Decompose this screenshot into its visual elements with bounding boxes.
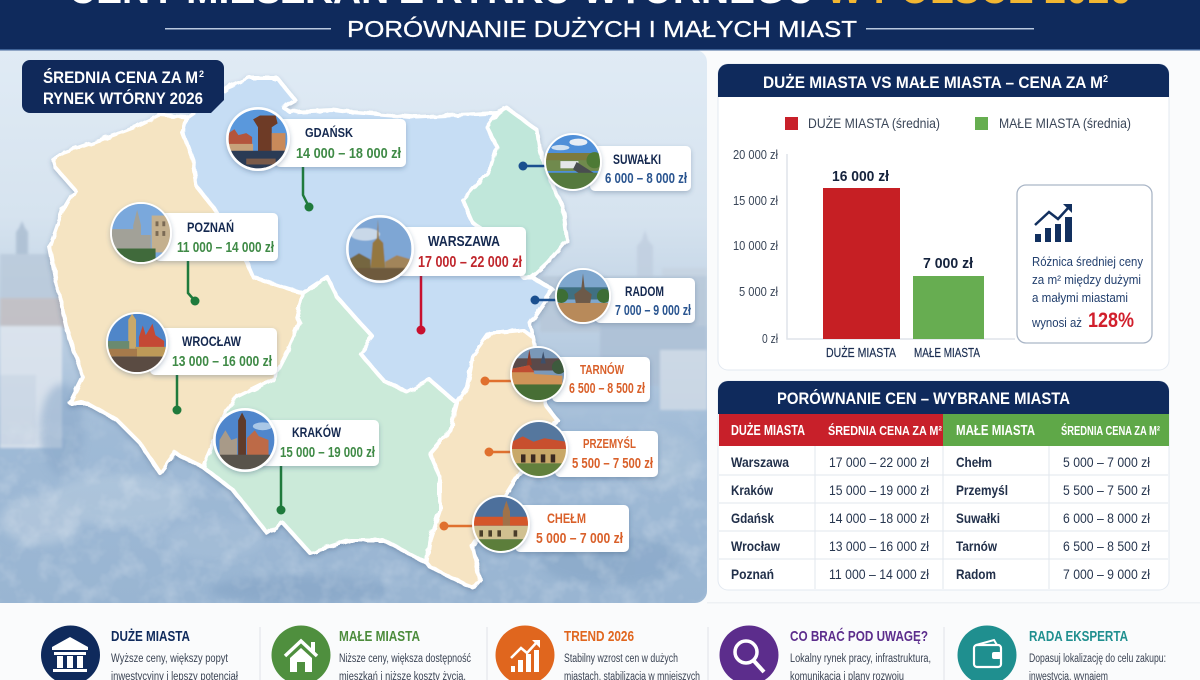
- callout: price difference: wynosi aż: [1031, 315, 1082, 330]
- table rows: Chełm: [956, 454, 992, 470]
- table rows: Radom: [956, 566, 996, 582]
- note: small cities: [272, 626, 471, 680]
- callout: price difference: 128%: [1088, 309, 1134, 332]
- city: Chełm: 5 000 – 7 000 zł: [536, 531, 623, 547]
- bar chart: 0 zł: [762, 331, 778, 346]
- callout: price difference: Różnica średniej ceny: [1032, 254, 1143, 269]
- table rows: Gdańsk: [731, 510, 774, 526]
- city: Przemyśl: [484, 420, 658, 478]
- city: Radom: RADOM: [625, 283, 664, 299]
- region: west: [50, 115, 303, 473]
- table rows: 5 500 – 7 500 zł: [1063, 483, 1150, 498]
- table rows: Wrocław: [731, 538, 780, 554]
- callout: price difference: za m² między dużymi: [1032, 272, 1141, 287]
- city: Gdańsk: 14 000 – 18 000 zł: [296, 146, 401, 162]
- bar chart: 15 000 zł: [733, 193, 778, 208]
- city: Tarnów: 6 500 – 8 500 zł: [569, 381, 645, 397]
- legend: DUŻE MIASTA (średnia): [808, 114, 940, 131]
- note: small cities: MAŁE MIASTA: [339, 628, 420, 645]
- icon: growth chart: [496, 626, 554, 680]
- city: Wrocław: WROCŁAW: [182, 333, 242, 349]
- badge: average price: ŚREDNIA CENA ZA M: [43, 68, 198, 87]
- city: Poznań: 11 000 – 14 000 zł: [177, 240, 274, 256]
- chart heading: 2: [1103, 74, 1108, 85]
- tree canopy texture: [0, 436, 707, 603]
- badge: average price: 2: [199, 69, 204, 79]
- city: Warszawa: 17 000 – 22 000 zł: [418, 254, 522, 271]
- note: trend: TREND 2026: [564, 628, 634, 645]
- icon: magnifier: [720, 626, 778, 680]
- note: what to consider: Lokalny rynek pracy, infrastruktura,: [790, 653, 931, 665]
- table header: MAŁE MIASTA: [956, 422, 1035, 439]
- table rows: 11 000 – 14 000 zł: [829, 567, 929, 582]
- city: Radom: 7 000 – 9 000 zł: [615, 303, 691, 319]
- note: expert advice: [958, 626, 1166, 680]
- note: large cities: Wyższe ceny, większy popyt: [111, 653, 229, 665]
- city: Warszawa: [346, 215, 526, 334]
- panel: bar chart comparison: [718, 64, 1169, 370]
- city: Poznań: POZNAŃ: [187, 219, 234, 235]
- panel: footer notes: [41, 602, 1200, 680]
- city: Chełm: [440, 495, 629, 553]
- table rows: [731, 454, 1150, 582]
- region: north and centre: [183, 78, 553, 403]
- icon: wallet: [958, 626, 1016, 680]
- table rows: Suwałki: [956, 510, 1000, 526]
- city: Kraków: 15 000 – 19 000 zł: [280, 445, 375, 461]
- badge: average price: RYNEK WTÓRNY 2026: [43, 89, 203, 108]
- city: Suwałki: SUWAŁKI: [613, 151, 661, 167]
- table rows: 6 500 – 8 500 zł: [1063, 539, 1150, 554]
- city: Warszawa: WARSZAWA: [428, 233, 500, 250]
- city: Kraków: KRAKÓW: [292, 423, 342, 440]
- bar chart: 16 000 zł: [832, 168, 890, 185]
- note: expert advice: RADA EKSPERTA: [1029, 628, 1128, 645]
- city: Kraków: [213, 408, 379, 514]
- bar chart: 7 000 zł: [923, 255, 974, 272]
- chart heading: DUŻE MIASTA VS MAŁE MIASTA – CENA ZA M: [763, 73, 1138, 92]
- city: Gdańsk: GDAŃSK: [305, 125, 354, 140]
- table rows: Warszawa: [731, 454, 789, 470]
- city: Suwałki: 6 000 – 8 000 zł: [605, 171, 687, 187]
- region: south-east: [427, 330, 557, 588]
- bar chart: 20 000 zł: [733, 147, 778, 162]
- icon: house: [272, 626, 330, 680]
- city: Wrocław: 13 000 – 16 000 zł: [172, 354, 272, 370]
- panel: map: [0, 50, 707, 604]
- icon: bank: [41, 626, 100, 680]
- note: trend: [496, 626, 700, 680]
- table rows: 7 000 – 9 000 zł: [1063, 567, 1150, 582]
- table rows: 17 000 – 22 000 zł: [829, 455, 929, 470]
- note: trend: Stabilny wzrost cen w dużych: [564, 653, 678, 665]
- bar chart: 5 000 zł: [739, 284, 778, 299]
- table rows: 13 000 – 16 000 zł: [829, 539, 929, 554]
- map background: city skyline and trees: [0, 50, 707, 604]
- table rows: 15 000 – 19 000 zł: [829, 483, 929, 498]
- bar chart: MAŁE MIASTA: [914, 346, 981, 360]
- bar chart: DUŻE MIASTA: [826, 346, 897, 360]
- table rows: 14 000 – 18 000 zł: [829, 511, 929, 526]
- city: Radom: [530, 268, 695, 324]
- header: [0, 0, 1200, 50]
- table rows: Kraków: [731, 482, 773, 498]
- city: Chełm: CHEŁM: [547, 510, 586, 526]
- callout: price difference: [1017, 185, 1152, 343]
- table rows: 5 000 – 7 000 zł: [1063, 455, 1150, 470]
- city: Poznań: [110, 202, 278, 306]
- city: Przemyśl: 5 500 – 7 500 zł: [572, 456, 653, 472]
- table rows: 6 000 – 8 000 zł: [1063, 511, 1150, 526]
- city: Tarnów: TARNÓW: [580, 362, 625, 377]
- city: Przemyśl: PRZEMYŚL: [583, 436, 636, 451]
- callout: price difference: a małymi miastami: [1032, 290, 1128, 305]
- table heading: PORÓWNANIE CEN – WYBRANE MIASTA: [777, 389, 1070, 408]
- badge: average price: [22, 60, 224, 113]
- table rows: Poznań: [731, 566, 774, 582]
- table header: [719, 414, 1169, 446]
- bar chart: [733, 147, 1015, 360]
- map of Poland: [50, 78, 567, 588]
- panel: price table: [718, 381, 1169, 590]
- note: large cities: [41, 626, 238, 680]
- city: Gdańsk: [226, 107, 406, 212]
- table header: ŚREDNIA CENA ZA M²: [1061, 423, 1160, 438]
- legend: MAŁE MIASTA (średnia): [999, 115, 1131, 131]
- bar chart: 10 000 zł: [733, 238, 778, 253]
- table rows: Przemyśl: [956, 482, 1008, 498]
- city: Wrocław: [106, 312, 277, 414]
- table rows: Tarnów: [956, 538, 997, 554]
- note: large cities: DUŻE MIASTA: [111, 628, 190, 645]
- note: what to consider: [720, 626, 931, 680]
- icon: rising chart: [1035, 204, 1072, 242]
- region: south centre: [203, 277, 457, 563]
- note: what to consider: CO BRAĆ POD UWAGĘ?: [790, 627, 928, 645]
- table header: DUŻE MIASTA: [731, 422, 805, 439]
- city: Suwałki: [518, 133, 691, 191]
- city: Tarnów: [480, 346, 650, 402]
- region: north-east: [463, 108, 567, 277]
- subtitle: PORÓWNANIE DUŻYCH I MAŁYCH MIAST: [347, 16, 857, 42]
- table header: ŚREDNIA CENA ZA M²: [828, 423, 942, 438]
- legend: [785, 114, 1131, 131]
- note: small cities: Niższe ceny, większa dostępność: [339, 653, 471, 665]
